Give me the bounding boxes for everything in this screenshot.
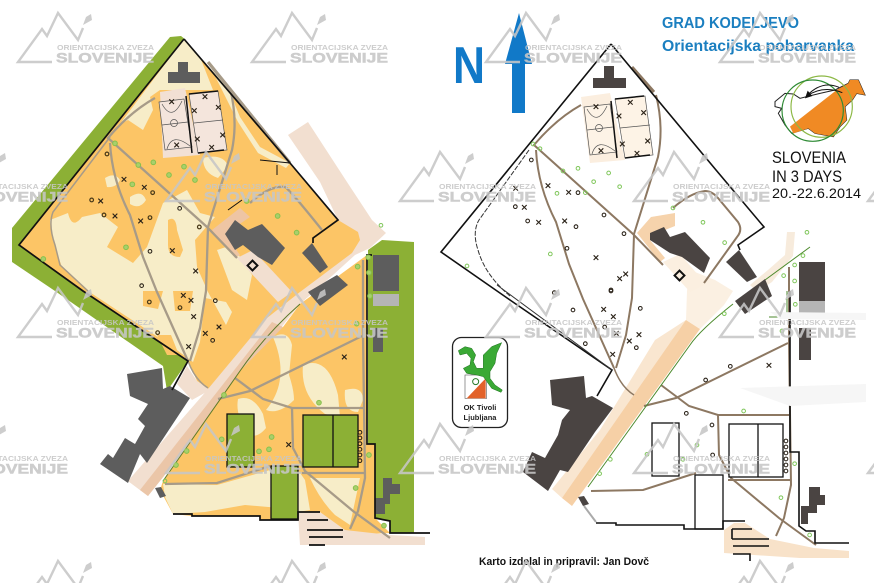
tracks	[51, 62, 390, 538]
watermark row 2: ORIENTACIJSKA ZVEZA	[205, 182, 303, 191]
yellow lobes	[143, 219, 193, 355]
logo: OK Tivoli Ljubljana	[452, 338, 508, 428]
paved area by castle	[212, 208, 250, 258]
markers north	[41, 94, 383, 287]
green lines east	[765, 247, 810, 317]
court black edges	[611, 96, 650, 158]
watermark row 1: SLOVENIJE	[56, 50, 154, 66]
buildings dark scan	[523, 66, 825, 524]
south paved pocket	[724, 523, 849, 558]
title line 2: Orientacijska pobarvanka	[662, 38, 854, 55]
watermark row 2: SLOVENIJE	[672, 188, 770, 204]
north letter: N	[453, 37, 485, 95]
credit line: Karto izdelal in pripravil: Jan Dovč	[479, 556, 649, 568]
sports court ground	[160, 88, 200, 158]
watermark row 3: SLOVENIJE	[56, 324, 154, 340]
grey service line	[584, 506, 596, 522]
road centre darker	[140, 322, 283, 496]
east green strip	[368, 240, 414, 533]
watermark row 4	[0, 424, 874, 476]
watermark row 4: SLOVENIJE	[438, 460, 536, 476]
white pitches	[652, 423, 783, 529]
courts ground	[581, 93, 625, 163]
watermark row 1	[18, 13, 857, 66]
scan shadow smudges	[740, 312, 866, 406]
sports courts	[159, 91, 227, 153]
watermark row 1: SLOVENIJE	[524, 50, 622, 66]
paved area at road junction	[177, 366, 210, 400]
logo: Slovenia in 3 days	[772, 76, 865, 201]
logo text: OK Tivoli	[464, 403, 496, 412]
logo: Slovenia in 3 days: IN 3 DAYS	[772, 167, 842, 186]
logo frame	[452, 338, 508, 428]
watermark row 3: ORIENTACIJSKA ZVEZA	[291, 318, 389, 327]
base yellow southern area	[160, 255, 390, 535]
arrow	[505, 13, 532, 113]
watermark row 4: SLOVENIJE	[204, 460, 302, 476]
icon: north arrow	[453, 13, 532, 113]
pale junction above road	[686, 270, 733, 329]
light building	[799, 301, 825, 313]
panel: coloured map (left)	[12, 36, 430, 545]
tracks	[534, 67, 816, 545]
watermark row 5	[18, 561, 794, 583]
cream small blobs	[105, 157, 363, 525]
monument symbol	[248, 261, 257, 270]
logo: OK Tivoli Ljubljana: Ljubljana	[464, 413, 497, 422]
watermark row 1: SLOVENIJE	[290, 50, 388, 66]
paved peach by castle	[637, 213, 675, 262]
pale path east	[750, 232, 795, 292]
road peach	[562, 320, 700, 506]
watermark row 3: SLOVENIJE	[758, 324, 856, 340]
black borders	[441, 44, 849, 561]
south-east paved pocket	[298, 512, 425, 545]
monument symbol	[675, 271, 684, 280]
watermark row 2	[0, 152, 874, 204]
dragon and control flag	[458, 343, 502, 398]
green forest strip west	[12, 36, 188, 391]
road and paved beige	[128, 122, 386, 496]
paved strip south of castle	[237, 250, 292, 302]
watermark row 4: ORIENTACIJSKA ZVEZA	[439, 454, 537, 463]
panel: black and white map (right)	[441, 44, 849, 561]
watermark row 1: SLOVENIJE	[758, 50, 856, 66]
watermark row 3: ORIENTACIJSKA ZVEZA	[57, 318, 155, 327]
watermark row 2: SLOVENIJE	[204, 188, 302, 204]
watermark row 3: SLOVENIJE	[524, 324, 622, 340]
dashed west path	[475, 150, 529, 296]
court black edges	[186, 91, 224, 153]
watermark row 4: ORIENTACIJSKA ZVEZA	[205, 454, 303, 463]
watermark row 1: ORIENTACIJSKA ZVEZA	[525, 43, 623, 52]
green pitches	[227, 414, 358, 519]
sports courts	[584, 96, 653, 158]
watermark row 3: ORIENTACIJSKA ZVEZA	[759, 318, 857, 327]
buildings	[100, 62, 400, 514]
black borders	[19, 39, 430, 545]
watermark row 3	[18, 288, 857, 340]
watermark row 1: ORIENTACIJSKA ZVEZA	[291, 43, 389, 52]
pale paved strip by castle	[663, 254, 706, 292]
light building	[373, 294, 399, 306]
thin green edge of road	[588, 304, 733, 487]
title line 1: GRAD KODELJEVO	[662, 15, 799, 32]
logo: Slovenia in 3 days: 20.-22.6.2014	[772, 185, 861, 201]
title	[662, 15, 854, 55]
double wall line	[497, 285, 612, 370]
logo text: SLOVENIA	[772, 148, 847, 167]
watermark row 3: SLOVENIJE	[290, 324, 388, 340]
watermark row 2: ORIENTACIJSKA ZVEZA	[439, 182, 537, 191]
markers north	[465, 100, 809, 292]
watermark row 4: ORIENTACIJSKA ZVEZA	[673, 454, 771, 463]
watermark row 1: ORIENTACIJSKA ZVEZA	[759, 43, 857, 52]
watermark row 4: SLOVENIJE	[672, 460, 770, 476]
Slovenia map emblem	[775, 76, 865, 141]
base yellow northern area	[19, 39, 360, 390]
cream open land	[50, 39, 290, 362]
watermark row 2: ORIENTACIJSKA ZVEZA	[673, 182, 771, 191]
watermark row 1: ORIENTACIJSKA ZVEZA	[57, 43, 155, 52]
curved track around castle	[673, 191, 740, 283]
watermark row 3: ORIENTACIJSKA ZVEZA	[525, 318, 623, 327]
road pale side	[552, 320, 700, 498]
road over yellow	[128, 262, 345, 496]
watermark row 2: SLOVENIJE	[438, 188, 536, 204]
markers south	[147, 293, 386, 528]
markers south	[552, 289, 811, 537]
thin dark green edge of road	[163, 304, 300, 481]
